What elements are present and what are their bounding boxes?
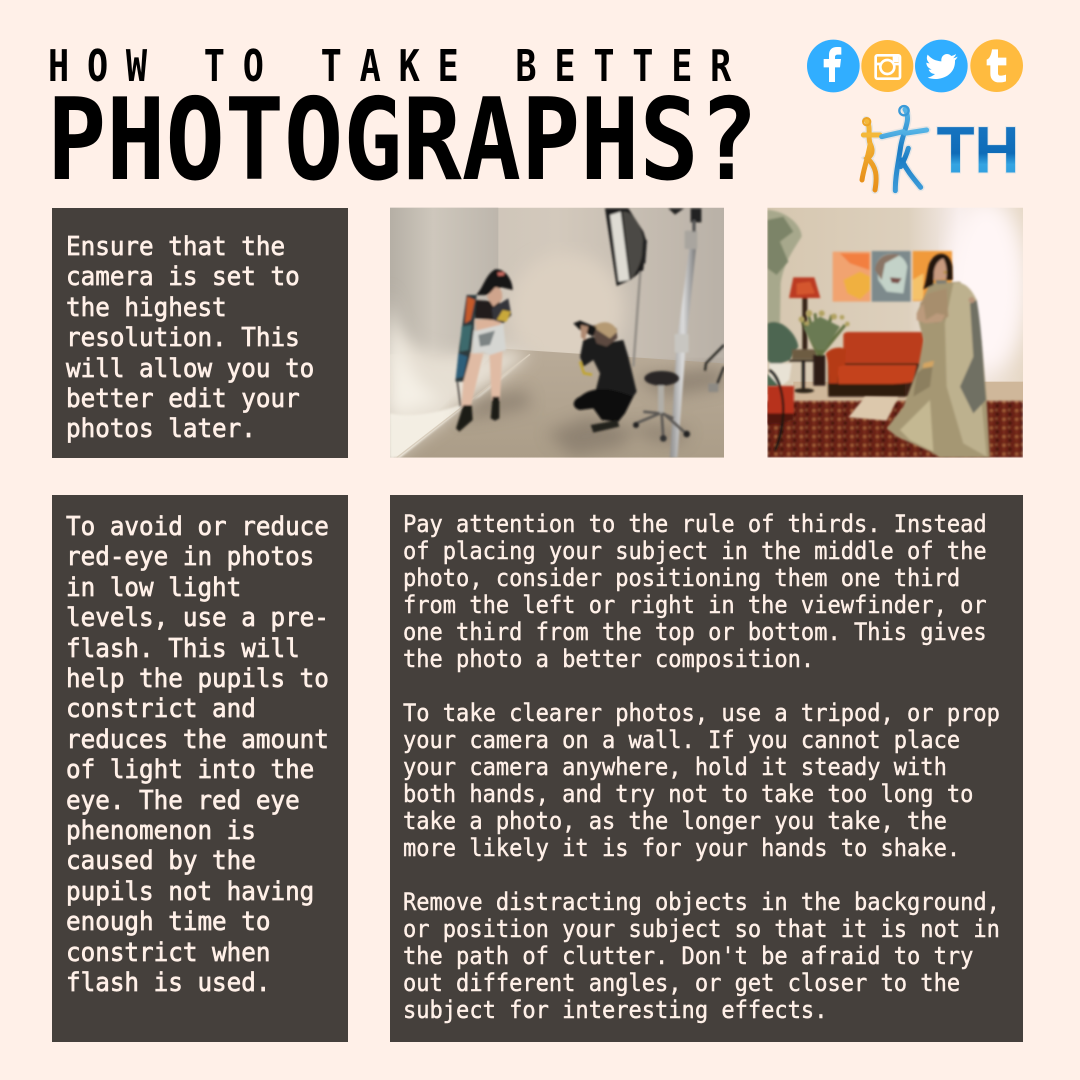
paintings bbox=[833, 251, 952, 302]
panel: red-eye tip bbox=[52, 495, 348, 1042]
lamp and side table bbox=[789, 277, 820, 393]
stool bbox=[633, 371, 690, 442]
panel: composition and steadiness tips bbox=[390, 495, 1023, 1042]
red armchair bbox=[767, 370, 794, 451]
carpet bbox=[767, 401, 1023, 458]
floor bbox=[393, 348, 724, 458]
red sofa bbox=[826, 332, 924, 397]
panel: camera resolution tip bbox=[52, 208, 348, 458]
icon: facebook bbox=[807, 40, 860, 92]
icon: tumblr bbox=[970, 39, 1023, 92]
text: composition and steadiness tips: Pay attention to the rule of thirds. Instead of placing your subject in the middle of the photo, consider positioning them one third from the left or right in the viewfinder, or one third from the top or bottom. This gives the photo a better composition. To take clearer photos, use a tripod, or prop your camera on a wall. If you cannot place your camera anywhere, hold it steady with both hands, and try not to take too long to take a photo, as the longer you take, the more likely it is for your hands to shake. Remove distracting objects in the background, or position your subject so that it is not in the path of clutter. Don't be afraid to try out different angles, or get closer to the subject for interesting effects. bbox=[402, 510, 999, 1024]
plant bbox=[767, 210, 802, 387]
text: red-eye tip: To avoid or reduce red-eye in photos in low light levels, use a pre- flash. This will help the pupils to constrict and reduces the amount of light into the eye. The red eye phenomenon is caused by the pupils not having enough time to constrict when flash is used. bbox=[66, 512, 329, 998]
logo: TH dancers bbox=[862, 106, 1019, 191]
icons: social media and TH logo bbox=[807, 39, 1023, 194]
vase with flowers bbox=[799, 310, 850, 386]
text: resolution tip: Ensure that the camera is set to the highest resolution. This will allow you to better edit your photos later. bbox=[66, 232, 314, 444]
shadows bbox=[455, 367, 723, 457]
model bbox=[455, 269, 513, 432]
photo: studio shoot bbox=[390, 208, 724, 458]
title: photographs?: PHOTOGRAPHS? bbox=[47, 74, 758, 206]
photo: bridal portrait in living room bbox=[767, 208, 1023, 458]
icon: instagram bbox=[861, 40, 913, 92]
light stand bbox=[668, 208, 724, 458]
floor runner bbox=[848, 397, 898, 421]
heading: how to take better: HOW TO TAKE BETTER bbox=[48, 41, 749, 92]
woman in embroidered gown bbox=[887, 254, 990, 458]
icon: twitter bbox=[915, 40, 968, 92]
softbox light bbox=[605, 208, 646, 367]
photographer bbox=[573, 321, 637, 433]
logo text: TH: TH bbox=[937, 113, 1019, 187]
